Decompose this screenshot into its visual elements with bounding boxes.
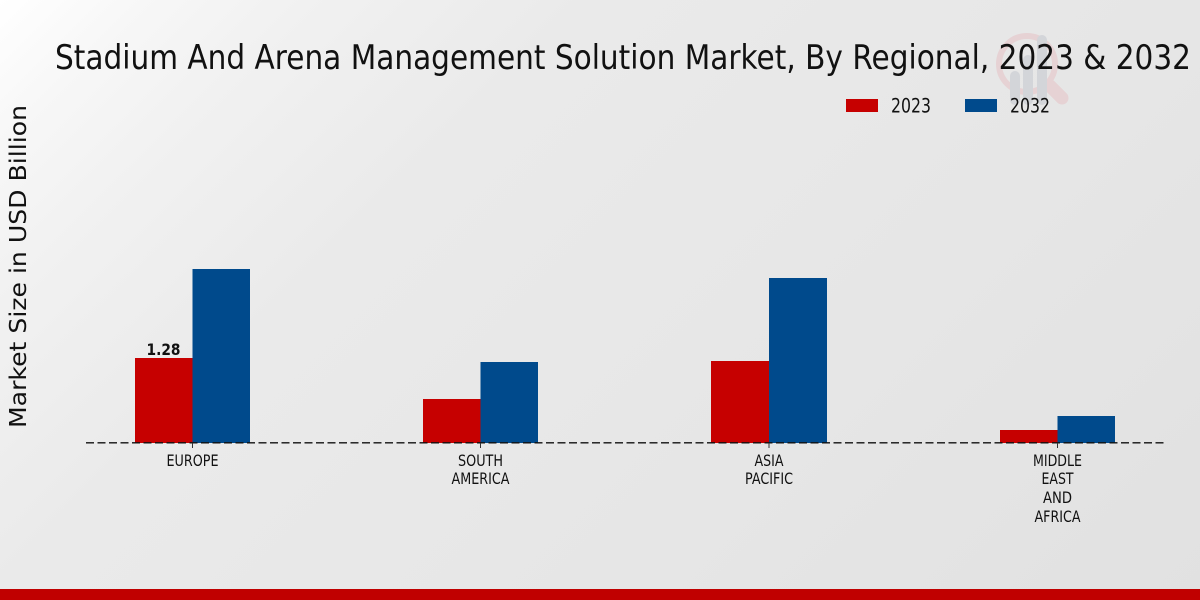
bars: Asia Pacific [711, 278, 827, 443]
legend swatch: 2032 [965, 99, 997, 112]
category label: Asia Pacific: ASIA [754, 451, 784, 470]
category label: Asia Pacific: PACIFIC [745, 469, 793, 488]
x axis baseline [86, 442, 1164, 444]
category label: Middle East and Africa: AND [1043, 488, 1072, 507]
category label: South America [452, 451, 510, 488]
y axis label: Market Size in USD Billion [6, 105, 32, 428]
category label: South America: SOUTH [458, 451, 503, 470]
category label: South America: AMERICA [452, 469, 510, 488]
value label: Europe 2023: 1.28 [146, 340, 180, 359]
legend swatch: 2023 [846, 99, 878, 112]
category label: Middle East and Africa: MIDDLE [1033, 451, 1082, 470]
category label: Asia Pacific [745, 451, 793, 488]
bars: Europe [135, 269, 250, 443]
category label: Middle East and Africa: AFRICA [1034, 507, 1081, 526]
bars: Middle East and Africa [1000, 416, 1115, 443]
bars: South America [423, 362, 538, 443]
category label: Middle East and Africa: EAST [1042, 469, 1074, 488]
legend [846, 94, 1050, 118]
footer stripe [0, 589, 1200, 600]
legend label: 2032: 2032 [1010, 94, 1050, 118]
bar chart [86, 269, 1164, 526]
legend label: 2023: 2023 [891, 94, 931, 118]
category label: Middle East and Africa [1033, 451, 1082, 526]
icon: watermark logo [999, 36, 1062, 100]
category label: Europe: EUROPE [166, 451, 218, 470]
